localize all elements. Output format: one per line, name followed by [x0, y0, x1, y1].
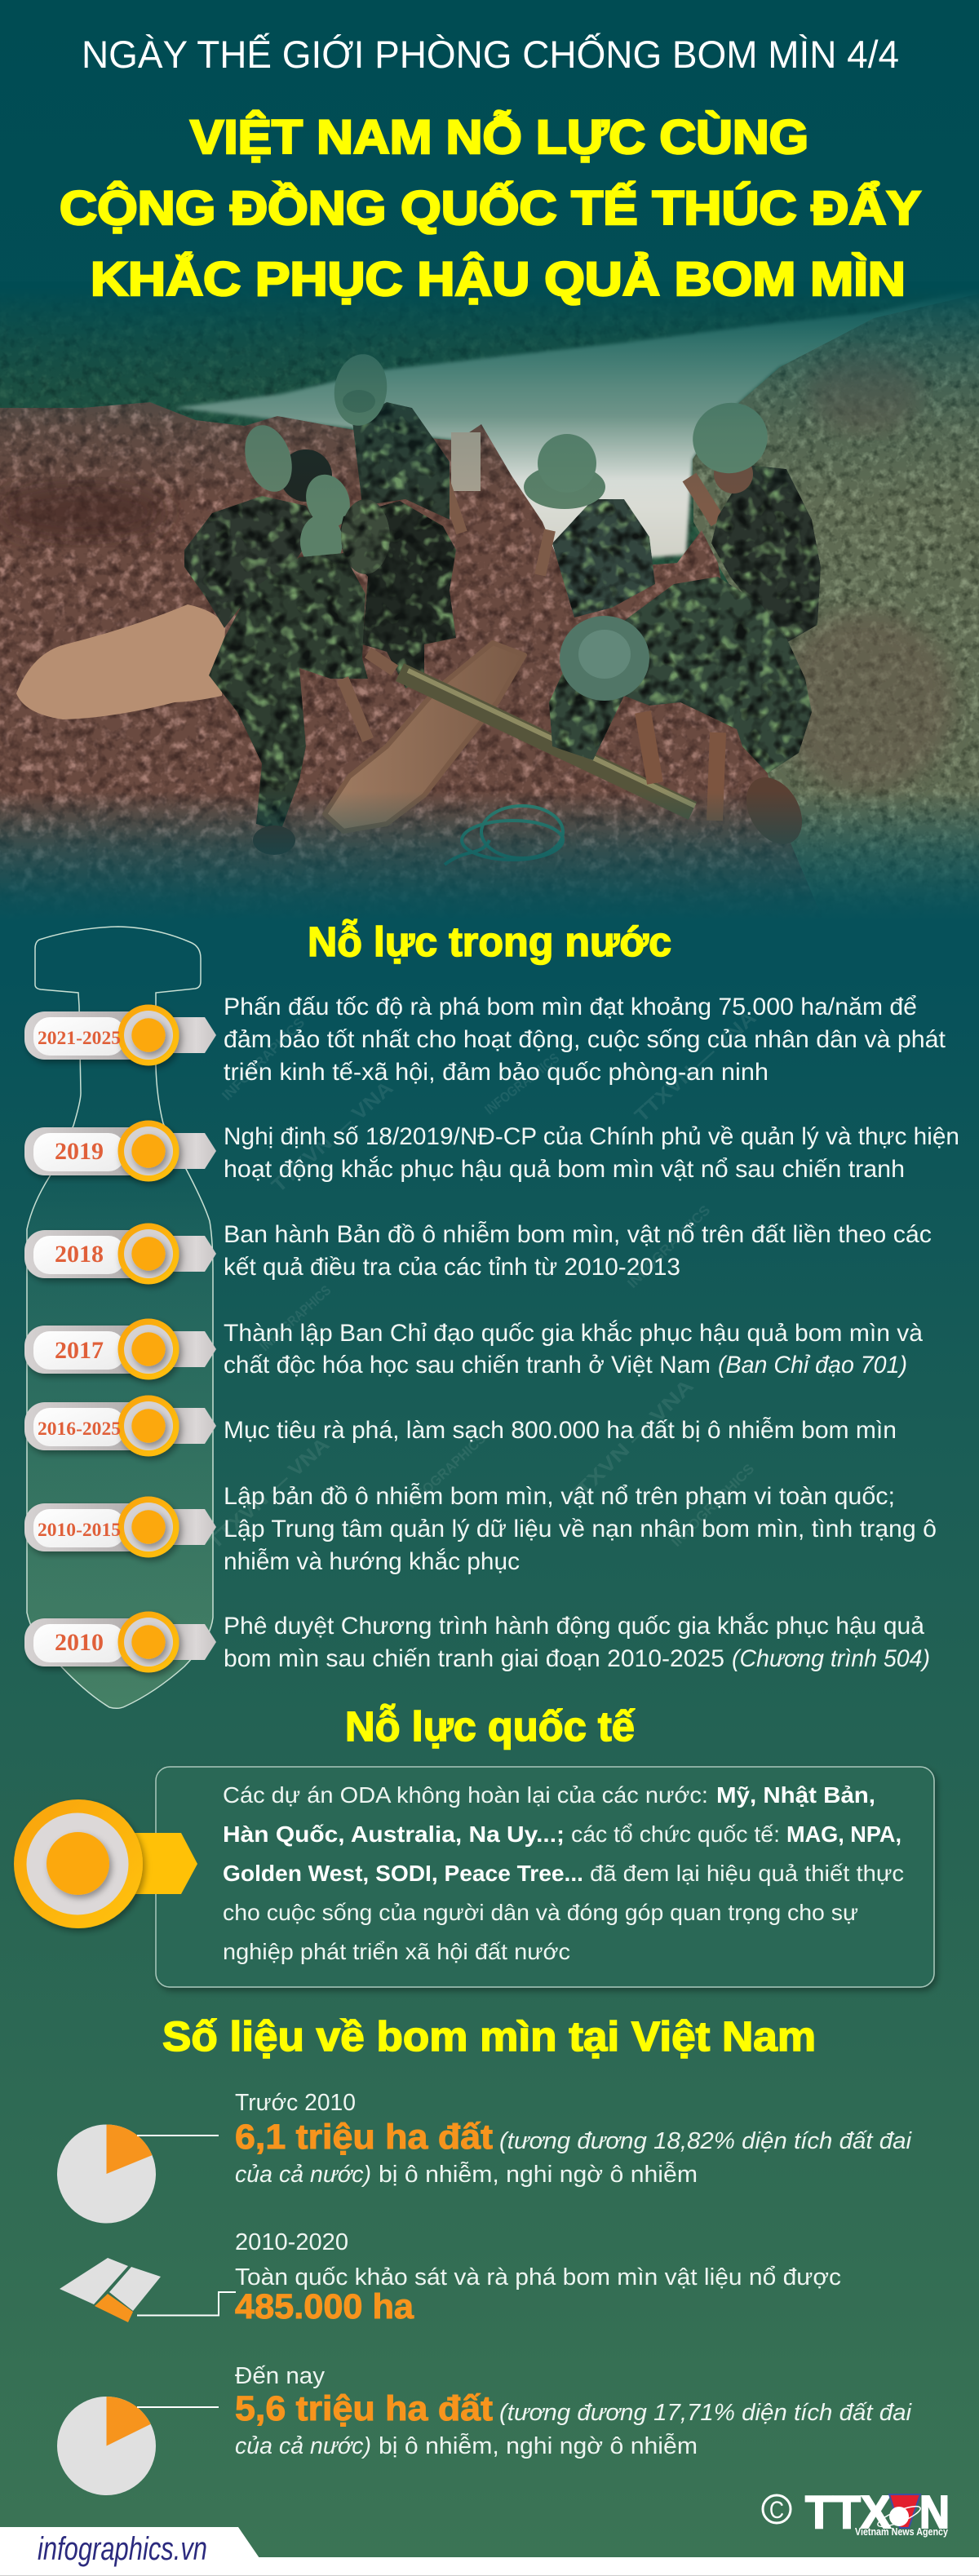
stat text 2010-2020: 2010-2020: [235, 2229, 348, 2255]
watermarks: INFOGRAPHICS: [404, 1431, 489, 1512]
event text 2021-2025: triển kinh tế-xã hội, đảm bảo quốc phòng-an ninh: [224, 1059, 769, 1086]
event text 2017: (Ban Chỉ đạo 701): [718, 1352, 907, 1379]
stat text to date: [235, 2363, 913, 2459]
event text 2017: [224, 1320, 923, 1379]
watermarks: TTXVN — VNA: [268, 1077, 397, 1197]
event text 2010-2015: [224, 1483, 937, 1575]
year marker 2010-2015: 2010-2015: [38, 1520, 121, 1540]
logo: TTXVN copyright: C: [769, 2497, 784, 2524]
icon: target marker for international box: [14, 1799, 197, 1928]
event text 2018: Ban hành Bản đồ ô nhiễm bom mìn, vật nổ trên đất liền theo các: [224, 1221, 932, 1248]
stat text before 2010: bị ô nhiễm, nghi ngờ ô nhiễm: [379, 2161, 698, 2188]
watermarks: TTXVN — VNA: [204, 1433, 334, 1553]
stat text to date: Đến nay: [235, 2363, 326, 2389]
box text: đã đem lại hiệu quả thiết thực: [590, 1861, 904, 1886]
stat text before 2010: (tương đương 18,82% diện tích đất đai: [499, 2128, 913, 2154]
year marker 2016-2025: [24, 1395, 216, 1457]
event text 2019: [224, 1123, 959, 1183]
timeline row 2019: [24, 1121, 959, 1183]
header block: [60, 33, 921, 306]
event text 2010: [224, 1613, 930, 1672]
box text: nghiệp phát triển xã hội đất nước: [223, 1939, 570, 1964]
photo: soldier centre: [300, 499, 456, 688]
photo: soldier right middle: [524, 434, 655, 617]
pie chart 18.82%: [57, 2124, 219, 2224]
icon: map pieces with cleared area: [60, 2258, 236, 2322]
watermarks: INFOGRAPHICS: [257, 1282, 334, 1354]
photo: soldier top centre: [330, 351, 462, 533]
logo: TTXVN copyright: Vietnam News Agency: [855, 2526, 948, 2538]
photo: bamboo carrying pole: [400, 671, 695, 811]
event text 2010-2015: nhiễm và hướng khắc phục: [224, 1548, 520, 1575]
year marker 2021-2025: [24, 1005, 216, 1065]
watermarks: TTXVN — VNA: [561, 1375, 698, 1512]
website label: infographics.vn: [38, 2531, 207, 2567]
panel: international efforts text box: [156, 1767, 934, 1987]
stat text 2010-2020: [235, 2229, 841, 2326]
event text 2021-2025: Phấn đấu tốc độ rà phá bom mìn đạt khoảng 75.000 ha/năm để: [224, 994, 917, 1020]
box text: Mỹ, Nhật Bản,: [716, 1782, 875, 1808]
photo: soldier back left: [184, 419, 357, 628]
heading: international efforts: Nỗ lực quốc tế: [345, 1703, 636, 1750]
event text 2010: Phê duyệt Chương trình hành động quốc gia khắc phục hậu quả: [224, 1613, 924, 1640]
watermarks: [204, 1007, 760, 1553]
logo: TTXVN copyright: N: [919, 2486, 950, 2538]
kicker line: NGÀY THẾ GIỚI PHÒNG CHỐNG BOM MÌN 4/4: [82, 33, 899, 76]
watermarks: INFOGRAPHICS: [219, 1015, 308, 1104]
event text 2010-2015: Lập bản đồ ô nhiễm bom mìn, vật nổ trên phạm vi toàn quốc;: [224, 1483, 895, 1510]
event text 2019: Nghị định số 18/2019/NĐ-CP của Chính phủ về quản lý và thực hiện: [224, 1123, 959, 1150]
event text 2010: bom mìn sau chiến tranh giai đoạn 2010-2025: [224, 1645, 724, 1672]
stat: before 2010: [57, 2090, 913, 2224]
main title: CỘNG ĐỒNG QUỐC TẾ THÚC ĐẨY: [60, 182, 921, 235]
timeline row 2017: [24, 1318, 923, 1380]
box text: Hàn Quốc, Australia, Na Uy...;: [223, 1821, 565, 1847]
main title: KHẮC PHỤC HẬU QUẢ BOM MÌN: [91, 253, 906, 306]
box text: cho cuộc sống của người dân và đóng góp quan trọng cho sự: [223, 1900, 858, 1925]
event text 2017: Thành lập Ban Chỉ đạo quốc gia khắc phục hậu quả bom mìn và: [224, 1320, 923, 1347]
event text 2021-2025: đảm bảo tốt nhất cho hoạt động, cuộc sống của nhân dân và phát: [224, 1026, 946, 1053]
year marker 2010: 2010: [55, 1629, 104, 1656]
panel: bomb-shaped timeline outline: [27, 927, 213, 1708]
year marker 2019: 2019: [55, 1138, 104, 1165]
timeline row 2021-2025: [24, 994, 946, 1086]
event text 2010-2015: Lập Trung tâm quản lý dữ liệu về nạn nhân bom mìn, tình trạng ô: [224, 1516, 937, 1543]
year marker 2018: 2018: [55, 1241, 104, 1268]
stat text 2010-2020: Toàn quốc khảo sát và rà phá bom mìn vật liệu nổ được: [235, 2264, 841, 2291]
main title: VIỆT NAM NỖ LỰC CÙNG: [190, 111, 808, 164]
year marker 2019: [24, 1121, 216, 1181]
stat text to date: 5,6 triệu ha đất: [235, 2389, 493, 2428]
logo: TTXVN copyright: TTX: [805, 2486, 891, 2538]
year marker 2010-2015: [24, 1496, 216, 1558]
heading: domestic efforts: Nỗ lực trong nước: [308, 918, 671, 965]
stat text before 2010: 6,1 triệu ha đất: [235, 2118, 493, 2157]
photo: unexploded bomb: [325, 643, 525, 831]
event text 2021-2025: [224, 994, 946, 1086]
pie chart 17.71%: [57, 2397, 219, 2495]
main title: [60, 111, 921, 306]
event text 2017: chất độc hóa học sau chiến tranh ở Việt Nam: [224, 1352, 711, 1379]
year marker 2017: [24, 1318, 216, 1380]
box text: Các dự án ODA không hoàn lại của các nước:: [223, 1782, 708, 1808]
photo: soldiers removing a bomb from mud: [0, 281, 979, 922]
timeline row 2010-2015: [24, 1483, 937, 1575]
year marker 2021-2025: 2021-2025: [38, 1028, 121, 1048]
photo: muddy puddle: [16, 604, 225, 719]
stat text before 2010: [235, 2090, 913, 2188]
event text 2019: hoạt động khắc phục hậu quả bom mìn vật nổ sau chiến tranh: [224, 1156, 905, 1183]
watermarks: INFOGRAPHICS: [668, 1461, 757, 1550]
stat text to date: (tương đương 17,71% diện tích đất đai: [499, 2400, 913, 2426]
timeline row 2010: [24, 1612, 930, 1672]
year marker 2017: 2017: [55, 1337, 104, 1364]
box text: các tổ chức quốc tế:: [571, 1821, 780, 1847]
watermarks: TTXVN — VNA: [631, 1007, 760, 1126]
stat text 2010-2020: 485.000 ha: [235, 2287, 414, 2326]
watermarks: INFOGRAPHICS: [482, 1050, 562, 1118]
event text 2016-2025: Mục tiêu rà phá, làm sạch 800.000 ha đất bị ô nhiễm bom mìn: [224, 1417, 897, 1444]
event text 2018: kết quả điều tra của các tỉnh từ 2010-2013: [224, 1254, 680, 1281]
photo top fade: [0, 281, 979, 506]
watermarks: INFOGRAPHICS: [624, 1202, 713, 1291]
photo: soldier front left: [209, 553, 395, 855]
stat: to date: [57, 2363, 913, 2495]
photo: green rope: [445, 806, 563, 865]
year marker 2016-2025: 2016-2025: [38, 1419, 121, 1439]
photo: soldier front right: [549, 577, 813, 854]
stat text before 2010: của cả nước): [235, 2162, 371, 2188]
photo bottom fade: [0, 791, 979, 922]
box text: MAG, NPA,: [786, 1821, 901, 1847]
box text: [223, 1782, 904, 1964]
heading: statistics: Số liệu về bom mìn tại Việt Nam: [162, 2013, 816, 2060]
stat text to date: bị ô nhiễm, nghi ngờ ô nhiễm: [379, 2432, 698, 2459]
stat: 2010-2020: [60, 2229, 841, 2326]
stat text before 2010: Trước 2010: [235, 2090, 356, 2116]
stat text to date: của cả nước): [235, 2433, 371, 2459]
year marker 2018: [24, 1224, 216, 1284]
footer strip with website tab: [0, 2527, 979, 2576]
logo: TTXVN copyright: [763, 2486, 950, 2538]
event text 2010: (Chương trình 504): [732, 1645, 930, 1672]
timeline row 2016-2025: [24, 1395, 897, 1457]
timeline row 2018: [24, 1221, 932, 1284]
box text: Golden West, SODI, Peace Tree...: [223, 1861, 583, 1886]
year marker 2010: [24, 1612, 216, 1672]
event text 2018: [224, 1221, 932, 1281]
photo: soldier far right: [684, 395, 821, 643]
